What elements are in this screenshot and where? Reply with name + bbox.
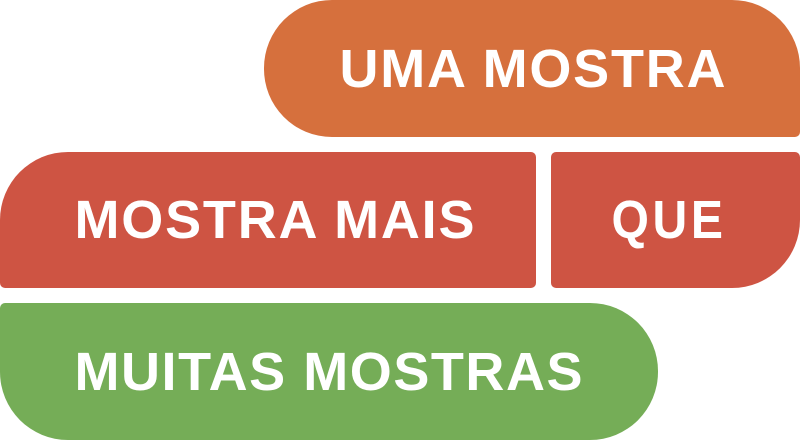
- panel: red block MOSTRA MAIS: [0, 152, 536, 288]
- panel: red block QUE: [551, 152, 800, 288]
- text: MOSTRA MAIS: MOSTRA MAIS: [74, 190, 474, 250]
- panel: green block MUITAS MOSTRAS: [0, 303, 658, 440]
- text: QUE: QUE: [612, 190, 726, 250]
- text: UMA MOSTRA: UMA MOSTRA: [340, 39, 726, 99]
- text: MUITAS MOSTRAS: MUITAS MOSTRAS: [74, 342, 582, 402]
- panel: orange block UMA MOSTRA: [264, 0, 800, 137]
